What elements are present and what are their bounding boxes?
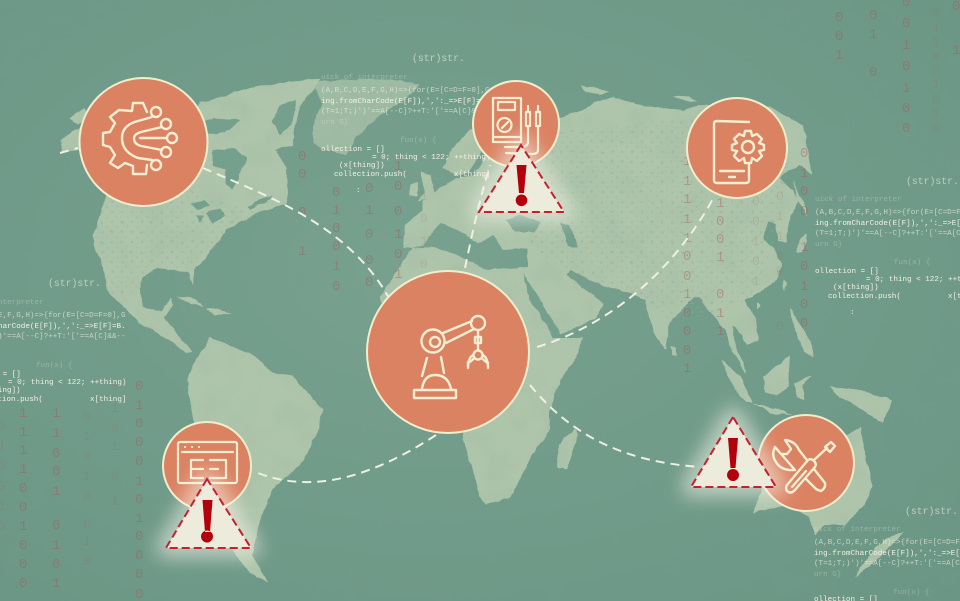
icon: browser window [178,442,237,483]
binary code columns: 010 [869,8,877,81]
Scandinavia [443,118,522,176]
warning: top centre [479,145,564,212]
code block: left: (str)str. [48,278,101,289]
British Isles [409,172,435,201]
Africa [380,247,583,505]
code block: left: x[thing] [90,396,126,404]
node: integration gear [80,78,208,206]
code block: top centre: (str)str. [412,53,465,64]
Greenland [310,79,420,155]
binary code columns: 1010 [420,189,428,272]
code block: left: = 0; thing < 122; ++thing) [8,379,126,387]
node: multimeter [473,81,559,167]
code block: top centre: : [356,187,361,195]
warning triangle [166,479,251,548]
code block: top centre: collection.push( [334,171,407,179]
binary code columns: 111110010001 [683,154,691,377]
code block: top centre: urn G} [321,119,348,127]
code block: right: collection.push( [828,293,901,301]
Cuba and Caribbean [177,296,232,315]
code block: top centre: ollection = [] [321,146,385,154]
code block: bottom right: (str)str. [905,506,958,517]
South America [187,337,323,582]
binary code columns: 001 [835,10,843,64]
code block: top centre: fun(x) { [400,137,436,145]
dashed connectors [60,148,715,482]
warning glow [691,417,776,487]
node: web window [163,422,251,510]
code block: top centre: = 0; thing < 122; ++thing) [372,154,490,162]
code block: top centre: (A,B,C,D,E,F,G,H)=>{for(E=[C=D=F=0],G [321,87,490,95]
binary code columns: 011001010 [932,5,940,135]
New Zealand [855,531,905,578]
North America stipple [95,190,257,297]
node: robot arm (central) [367,271,529,433]
binary code columns: 1111001000 [19,406,27,592]
warning: australia [691,417,776,487]
exclamation mark [516,165,527,206]
code block: right: (x[thing]) [833,284,879,292]
binary code columns: 010010 [332,185,340,295]
warning glow [479,145,564,212]
exclamation mark [201,500,213,543]
binary code columns: 00101 [752,194,760,289]
code block: right: ollection = [] [815,268,879,276]
icon: phone with gear [714,121,764,183]
code block: right: fun(x) { [894,259,930,267]
exclamation mark [727,438,739,481]
code block: top centre: uick of interpreter [321,74,408,82]
Madagascar [557,428,578,470]
node: phone settings [687,98,787,198]
warning glow [166,479,251,548]
code block: bottom right: uick of interpreter [814,526,901,534]
code block: top centre: (T=1;T;)')'==A[--C]?++T:'['==A[C]&&-- [321,108,490,116]
binary code columns: 010001010000 [135,379,143,601]
code block: bottom right: urn G} [814,571,841,579]
Hudson Bay and arctic water [178,100,296,190]
binary code columns: 010101 [111,379,119,509]
code block: top centre: x[thing] [454,171,490,179]
Arctic islands [580,86,697,102]
icon: multimeter [493,98,540,154]
North America [60,79,320,353]
binary code columns: 01000 [365,181,373,291]
code block: left: fun(x) { [36,362,72,370]
Eurasia [403,97,812,373]
code block: top centre [321,53,490,195]
icon: robotic arm [414,316,488,398]
binary code columns: 01010010 [83,409,91,569]
code block: right: urn G} [815,241,842,249]
code block: left [0,278,126,404]
code block: right [815,176,960,317]
Japan and Sakhalin [792,180,808,253]
Red Sea [523,273,560,336]
Eurasia stipple [528,107,790,323]
binary code columns: 1 [298,244,306,260]
South-East Asia islands [670,279,893,423]
Australia [753,427,873,535]
icon: gear with circuit traces [103,103,177,174]
binary code columns: 110010101 [52,406,60,592]
code block: top centre: ing.fromCharCode(E[F]),',':_=>E[F]=B. [321,98,490,106]
code block: right: uick of interpreter [815,196,902,204]
code block: right: : [850,309,855,317]
code block: right: (str)str. [906,176,959,187]
binary code columns: 100101 [394,159,402,283]
Great Lakes [190,195,272,223]
world map [60,79,905,582]
warning triangle [691,417,776,487]
binary code columns: 011000 [776,189,784,334]
node: tools [758,415,854,511]
binary code columns: 1001011 [716,196,724,340]
binary code columns: 000 [298,149,306,221]
warning: south america [166,479,251,548]
icon: wrench and screwdriver [773,440,835,492]
Inland seas [505,215,578,247]
code block: bottom right [814,506,960,601]
code block: bottom right: fun(x) { [893,589,929,597]
warning triangle [479,145,564,212]
code block: top centre: (x[thing]) [339,162,385,170]
binary code columns: 010010100 [800,146,808,332]
